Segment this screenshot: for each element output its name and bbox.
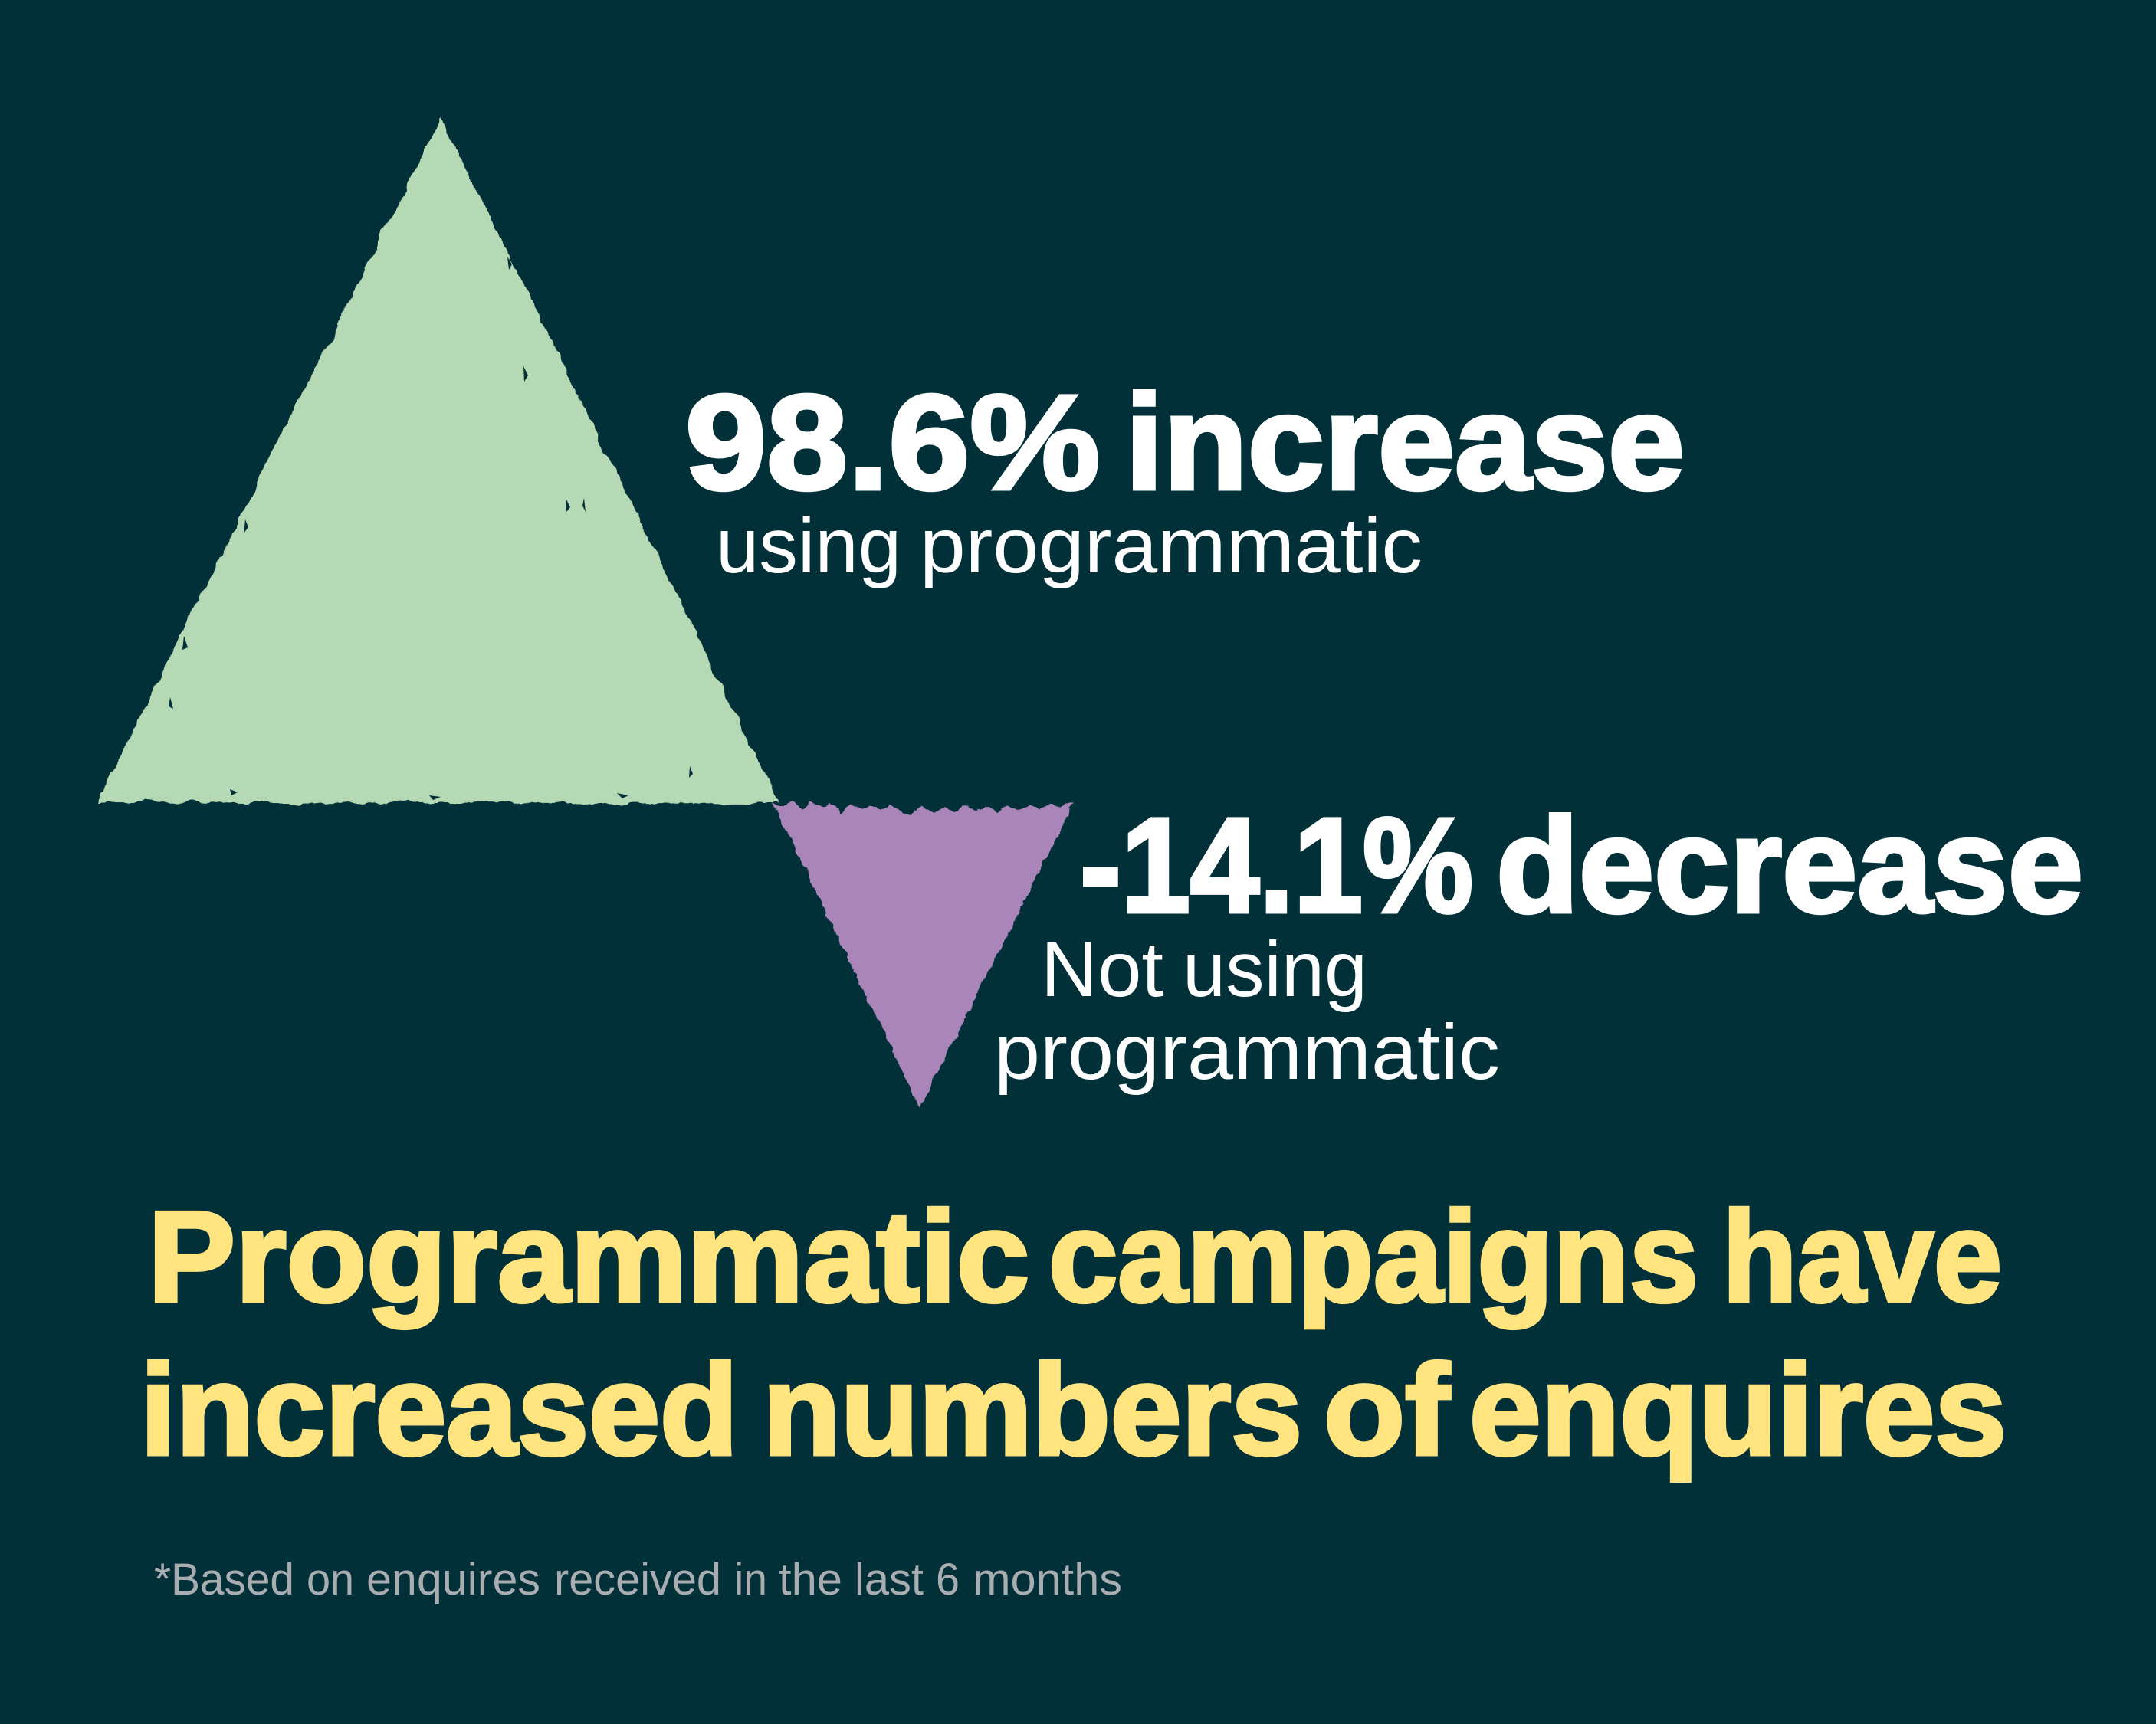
footnote: months [973, 1555, 1122, 1604]
heading: enquires [1469, 1338, 2007, 1482]
label: not using programmatic: using [1183, 926, 1367, 1013]
stat: increase: increase [1125, 368, 1685, 518]
heading: Programmatic [148, 1185, 1029, 1329]
label: using programmatic: using [716, 502, 901, 589]
label: not using programmatic: programmatic [994, 1008, 1500, 1096]
footnote: in [734, 1555, 767, 1604]
heading: campaigns [1048, 1185, 1698, 1329]
heading: increased [140, 1338, 738, 1482]
heading: have [1722, 1185, 2002, 1329]
stat: decrease: -14.1% [1080, 791, 1473, 941]
heading: of [1324, 1338, 1450, 1482]
footnote: on [307, 1555, 354, 1604]
icon: purple downward triangle [773, 801, 1075, 1108]
footnote: the [779, 1555, 842, 1604]
heading: numbers [763, 1338, 1302, 1482]
footnote: *Based [154, 1555, 294, 1604]
icon: green upward triangle [97, 118, 779, 804]
stat: decrease: decrease [1496, 791, 2083, 941]
stat: increase [685, 368, 1685, 518]
footnote: last [855, 1555, 924, 1604]
stat: increase: 98.6% [685, 368, 1100, 518]
label: not using programmatic [994, 926, 1500, 1096]
label: using programmatic [716, 502, 1423, 589]
stat: decrease [1080, 791, 2083, 941]
heading [140, 1185, 2007, 1482]
footnote [154, 1555, 1122, 1604]
footnote: 6 [936, 1555, 960, 1604]
label: using programmatic: programmatic [920, 502, 1423, 589]
footnote: enquires [366, 1555, 540, 1604]
footnote: received [554, 1555, 721, 1604]
label: not using programmatic: Not [1041, 926, 1163, 1013]
